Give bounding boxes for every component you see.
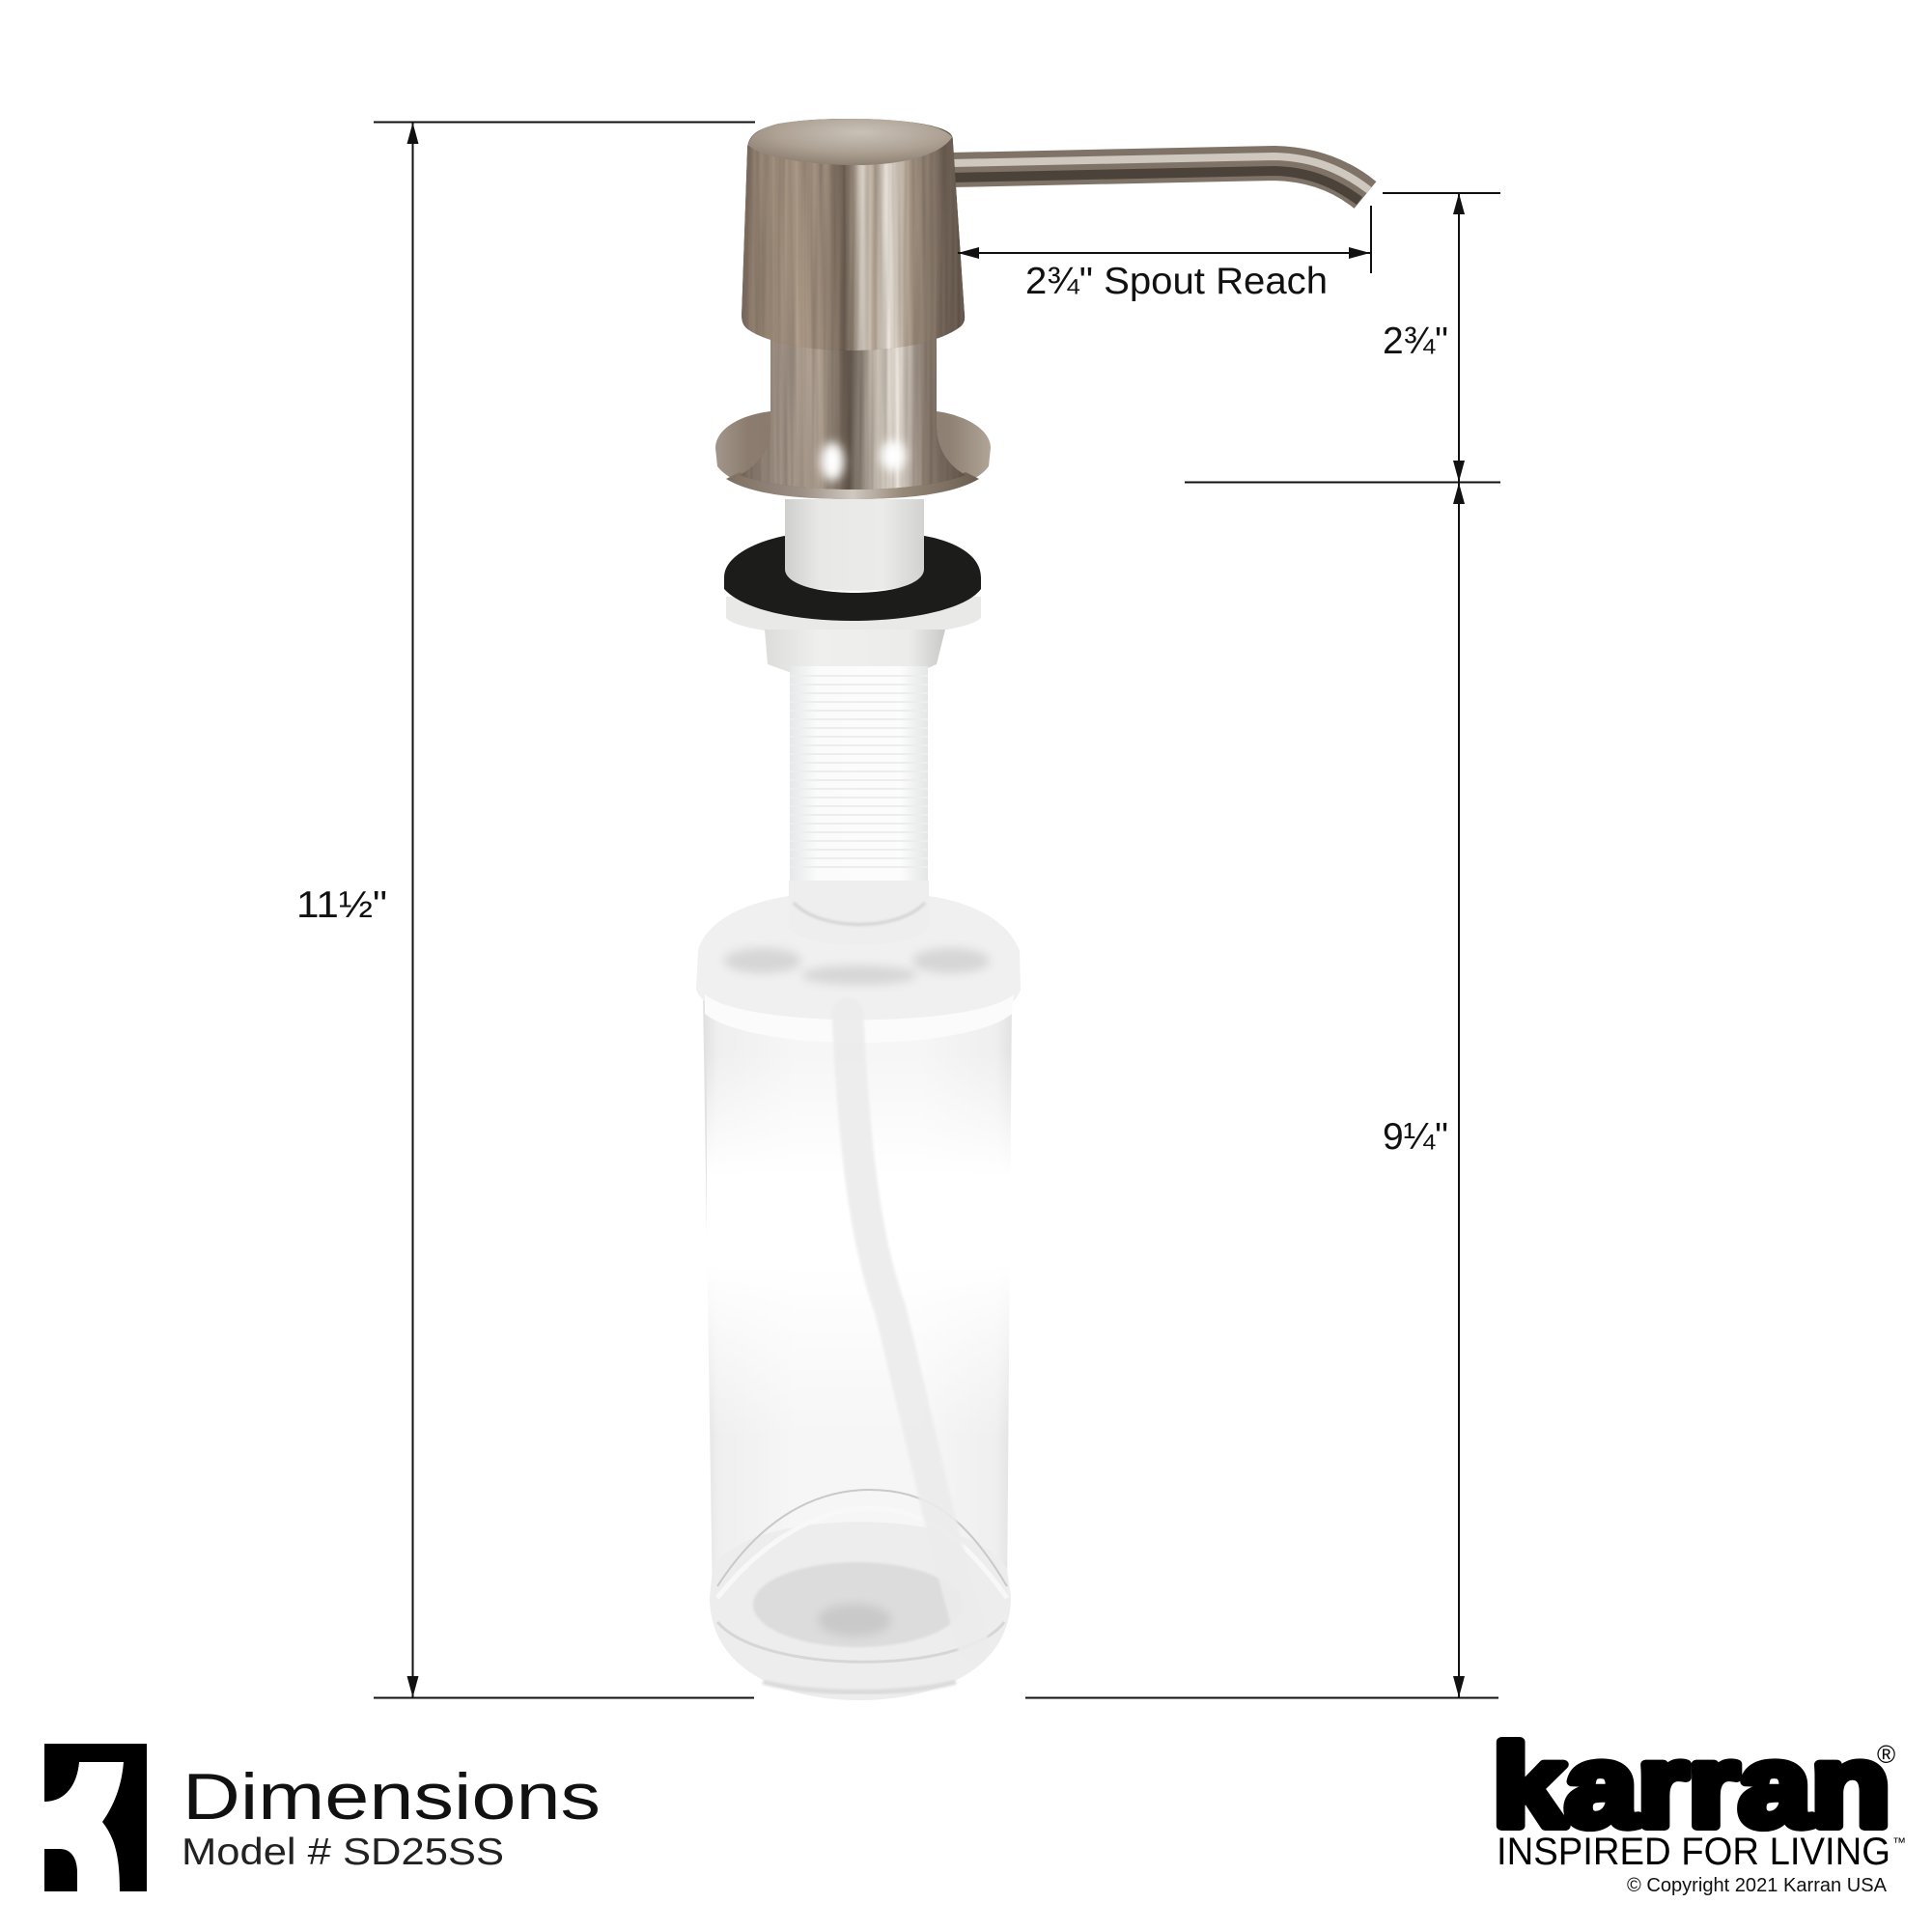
arrow (411, 123, 413, 1697)
model number: Model # SD25SS (182, 1832, 504, 1873)
bottle (696, 881, 1021, 1700)
dimension: upper height 2¾ (1185, 193, 1500, 483)
title block (182, 1760, 601, 1873)
Karran logo (1493, 1721, 1906, 1896)
pump cap (742, 119, 965, 350)
arrow (958, 252, 1370, 254)
bright band (707, 1052, 1014, 1439)
copyright: © Copyright 2021 Karran USA (1627, 1875, 1888, 1896)
bottom reflection (763, 1682, 956, 1692)
cap body (742, 119, 965, 350)
heading: Dimensions (182, 1760, 601, 1833)
wordmark: karran (1493, 1721, 1890, 1851)
neck reflections (794, 903, 925, 925)
upper thread (785, 499, 924, 591)
mounting flange (715, 411, 991, 499)
plastic nut (765, 630, 945, 673)
extension lines (374, 122, 755, 1697)
arrow (1458, 193, 1460, 482)
label: 9¼" (1383, 1116, 1448, 1158)
dimension: overall height 11½ (296, 122, 755, 1697)
extension lines (1185, 193, 1500, 483)
bottle body (703, 994, 1012, 1603)
base inner ellipse (753, 1562, 962, 1647)
icon: Karran K mark (44, 1744, 147, 1891)
base ring 2 (717, 1508, 1007, 1598)
cap top face (748, 119, 952, 165)
threaded tube (790, 666, 928, 883)
arrow (1458, 483, 1460, 1697)
black washer (724, 536, 981, 621)
flange bottom band (726, 472, 979, 499)
neck highlights (821, 440, 906, 481)
bottle shoulder (696, 896, 1021, 1035)
dip tube (848, 1014, 973, 1645)
base centre (818, 1604, 891, 1637)
registered mark: ® (1877, 1740, 1895, 1769)
label: 2¾" Spout Reach (1025, 261, 1328, 302)
tagline: INSPIRED FOR LIVING (1497, 1831, 1890, 1873)
shoulder highlight (705, 994, 1014, 1043)
extension line (1025, 1697, 1498, 1699)
tick (1370, 206, 1372, 273)
flange lip (715, 411, 991, 499)
bottle base (710, 1522, 1011, 1700)
label: 11½" (296, 884, 387, 926)
base rings (717, 1490, 1007, 1586)
shoulder reflections (724, 948, 990, 985)
label: 2¾" (1383, 321, 1448, 362)
soap dispenser product (696, 119, 1369, 1700)
white washer (726, 597, 981, 636)
spout (950, 156, 1369, 201)
trademark: ™ (1892, 1834, 1906, 1850)
lower rim (717, 1622, 1004, 1662)
pump neck and cone (740, 328, 966, 490)
bottle neck (789, 881, 929, 945)
